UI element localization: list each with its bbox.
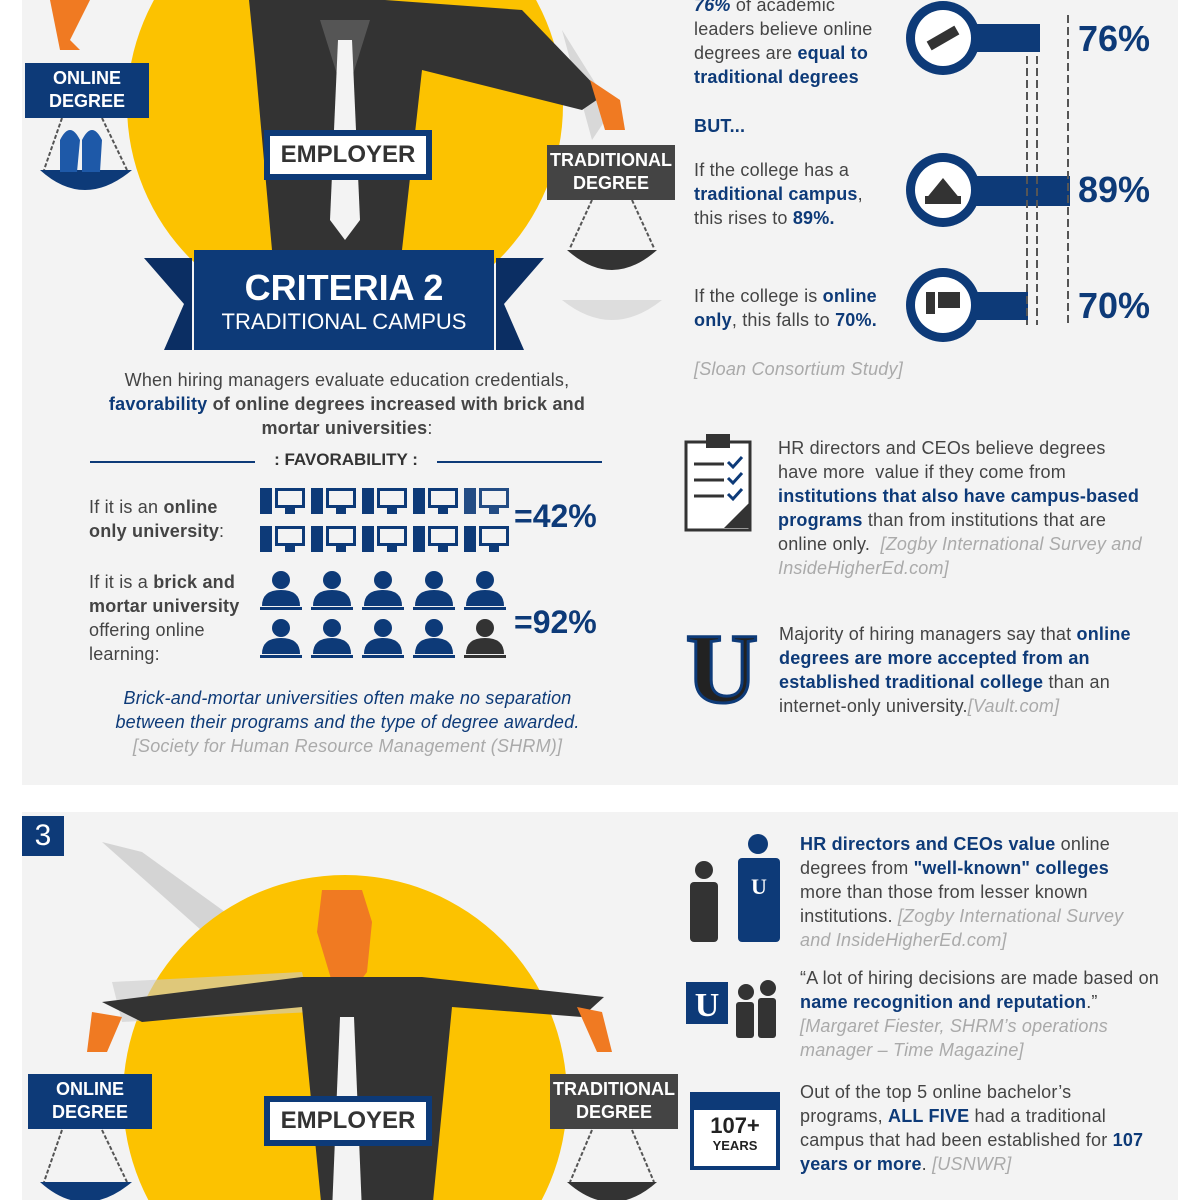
text: traditional campus: If the college has a traditional campus, this rises to 89%. xyxy=(694,160,863,228)
text: but: BUT... xyxy=(694,116,745,136)
icon: calendar 107+: YEARS xyxy=(713,1138,757,1153)
stat: 92%: =92% xyxy=(514,604,597,640)
icon: clipboard xyxy=(684,434,752,532)
icon: U: U xyxy=(686,613,758,724)
icon: two people: U xyxy=(751,874,767,899)
text: online only: If the college is online only, this falls to 70%. xyxy=(694,286,877,330)
text: brick and mortar: offering online xyxy=(89,620,205,640)
stat: 76%: 76% xyxy=(1078,18,1150,59)
label: employer: EMPLOYER xyxy=(281,1107,415,1134)
label: online degree: DEGREE xyxy=(52,1102,128,1122)
panel: criteria 2 xyxy=(22,0,1178,785)
text: note: [Society for Human Resource Management (SHRM)] xyxy=(133,736,562,756)
text: source sloan: [Sloan Consortium Study] xyxy=(694,359,903,379)
text: online only: If it is an online xyxy=(89,497,218,517)
icons: people xyxy=(260,571,506,658)
label: traditional degree: TRADITIONAL xyxy=(550,150,672,170)
label: traditional degree: TRADITIONAL xyxy=(553,1079,675,1099)
illustration: employer scale 3 xyxy=(40,842,657,1200)
stat: 89%: 89% xyxy=(1078,169,1150,210)
label: traditional degree xyxy=(547,145,675,200)
stat: 42%: =42% xyxy=(514,498,597,534)
chart: sloan bars xyxy=(906,1,1070,342)
text: brick and mortar: learning: xyxy=(89,644,160,664)
label: traditional degree: DEGREE xyxy=(573,173,649,193)
text: majority: Majority of hiring managers say that online degrees are more accepted from an established traditional college than an internet-only university.[Vault.com] xyxy=(779,624,1131,716)
label: online degree: ONLINE xyxy=(53,68,121,88)
text: name recognition: [Margaret Fiester, SHRM’s operations manager – Time Magazine] xyxy=(800,1016,1108,1060)
icon: U with people: U xyxy=(695,987,719,1024)
label: employer xyxy=(264,130,432,180)
text: online only: only university: xyxy=(89,521,224,541)
icon: calendar 107+ xyxy=(690,1092,780,1170)
text: brick and mortar xyxy=(89,572,240,664)
label: traditional degree: DEGREE xyxy=(576,1102,652,1122)
icon: U with people xyxy=(686,980,776,1038)
text: name recognition xyxy=(800,968,1159,1060)
text: note: Brick-and-mortar universities often make no separation between their programs and the type of degree awarded. xyxy=(115,688,580,732)
label: online degree xyxy=(28,1074,152,1129)
text: note xyxy=(115,688,580,756)
heading: favorability: : FAVORABILITY : xyxy=(274,450,418,469)
text: intro: When hiring managers evaluate education credentials, favorability of online degrees increased with brick and mortar universities: xyxy=(109,370,585,438)
icons: computers xyxy=(260,488,509,552)
icon: calendar 107+: 107+ xyxy=(710,1113,760,1138)
label: traditional degree xyxy=(550,1074,678,1129)
text: brick and mortar: If it is a brick and xyxy=(89,572,235,592)
label: online degree: DEGREE xyxy=(49,91,125,111)
text: top 5: Out of the top 5 online bachelor’s programs, ALL FIVE had a traditional campus that had been established for 107 years or more. [USNWR] xyxy=(800,1082,1143,1174)
banner: criteria 2: TRADITIONAL CAMPUS xyxy=(222,309,466,334)
panel: criteria 3 xyxy=(22,812,1178,1200)
badge: 3: 3 xyxy=(35,819,51,852)
text: hr directors: HR directors and CEOs believe degrees have more value if they come from institutions that also have campus-based programs than from institutions that are online only. [Zogby International Survey and InsideHigherEd.com] xyxy=(778,438,1142,578)
text: online only xyxy=(89,497,224,541)
text: brick and mortar: mortar university xyxy=(89,596,239,616)
badge: 3 xyxy=(22,816,64,856)
illustration: employer scale 2 xyxy=(40,0,662,320)
label: online degree: ONLINE xyxy=(56,1079,124,1099)
label: online degree xyxy=(25,63,149,118)
banner: criteria 2 xyxy=(144,250,544,350)
text: name recognition: “A lot of hiring decisions are made based on name recognition and reputation.” xyxy=(800,968,1159,1012)
stat: 70%: 70% xyxy=(1078,285,1150,326)
banner: criteria 2: CRITERIA 2 xyxy=(245,267,443,308)
icon: two people xyxy=(690,834,780,942)
text: well-known: HR directors and CEOs value online degrees from "well-known" colleges more than those from lesser known institutions. [Zogby International Survey and InsideHigherEd.com] xyxy=(800,834,1123,950)
label: employer: EMPLOYER xyxy=(281,141,415,168)
label: employer xyxy=(264,1096,432,1146)
